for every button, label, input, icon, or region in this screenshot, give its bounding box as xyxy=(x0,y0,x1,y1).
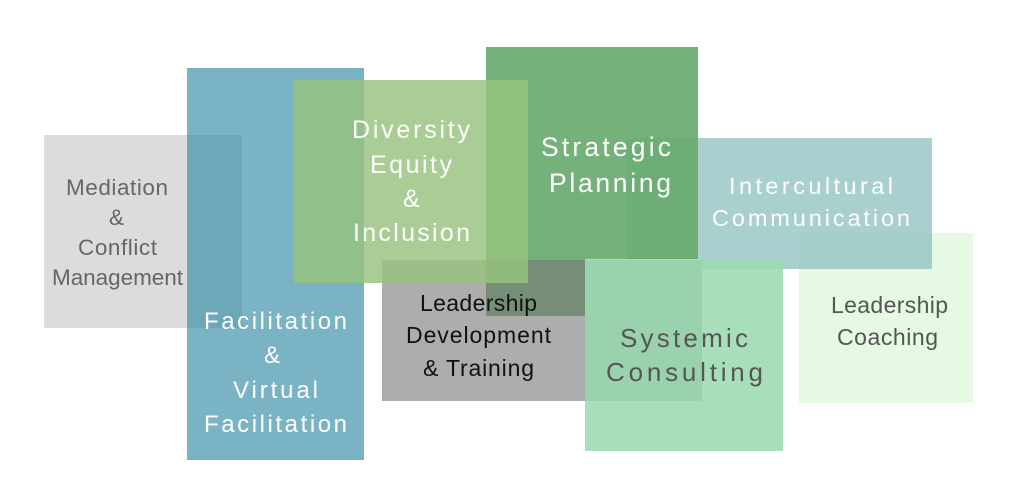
panel: facilitation and virtual facilitation: Facilitation xyxy=(204,411,347,438)
panel: intercultural communication: Intercultural xyxy=(729,173,893,199)
panel: mediation and conflict management: & xyxy=(109,205,124,230)
panel: strategic planning: Strategic xyxy=(541,132,671,162)
panel: strategic planning: Planning xyxy=(549,168,671,198)
panel: facilitation and virtual facilitation: Facilitation xyxy=(204,308,347,335)
panel: leadership development and training xyxy=(382,260,702,401)
panel: intercultural communication xyxy=(627,138,932,269)
panel: leadership development and training: Leadership xyxy=(420,290,537,316)
panel: mediation and conflict management: Mediation xyxy=(66,175,168,200)
panel: diversity equity and inclusion xyxy=(294,80,528,283)
panel: diversity equity and inclusion: Equity xyxy=(370,151,452,179)
panel: diversity equity and inclusion: Inclusion xyxy=(353,219,470,247)
panel: leadership development and training: & Training xyxy=(423,355,534,381)
panel: systemic consulting: Consulting xyxy=(606,357,763,387)
panel: intercultural communication: Communication xyxy=(712,205,910,231)
panel: mediation and conflict management: Conflict xyxy=(78,235,158,260)
panel: systemic consulting xyxy=(585,259,783,451)
panel: facilitation and virtual facilitation: Virtual xyxy=(233,377,318,404)
panel: mediation and conflict management: Management xyxy=(52,265,184,290)
panel: strategic planning xyxy=(486,47,698,316)
panel: systemic consulting: Systemic xyxy=(620,323,748,353)
panel: leadership development and training: Development xyxy=(406,322,552,348)
panel: diversity equity and inclusion: Diversity xyxy=(352,116,470,144)
panel: facilitation and virtual facilitation: & xyxy=(264,342,280,369)
panel: diversity equity and inclusion: & xyxy=(403,185,420,213)
panel: leadership coaching xyxy=(799,233,973,403)
panel: leadership coaching: Coaching xyxy=(837,324,938,350)
panel: leadership coaching: Leadership xyxy=(831,292,948,318)
panel: mediation and conflict management xyxy=(44,135,242,328)
panel: facilitation and virtual facilitation xyxy=(187,68,364,460)
